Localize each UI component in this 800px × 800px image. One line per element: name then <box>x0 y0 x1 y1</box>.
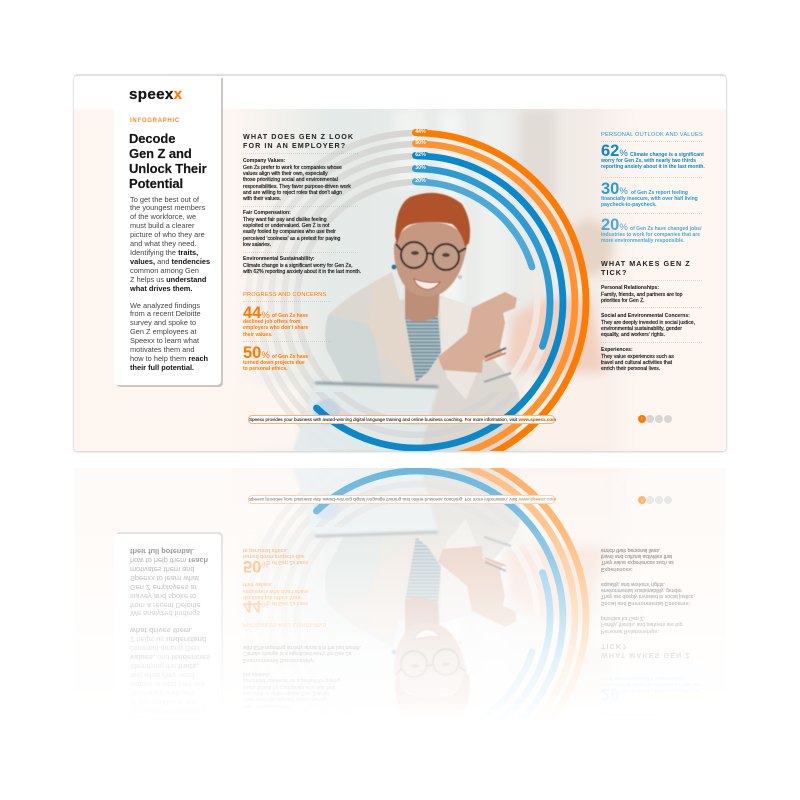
reflection of the card: 62% <box>601 759 628 777</box>
main title: Decode <box>129 130 175 146</box>
reflection of the card: with 62% reporting anxiety about it in the last month. <box>243 644 361 650</box>
ring: 30% <box>417 169 550 346</box>
ring: 44% <box>417 133 586 461</box>
reflection of the card: They want fair pay and dislike feeling <box>243 696 327 702</box>
reflection of the card: low salaries. <box>243 671 271 677</box>
stat text: 30 percent: paycheck-to-paycheck. <box>601 202 657 208</box>
text: company values: values align with their own, especially <box>243 171 328 177</box>
text: fair compensation: low salaries. <box>243 242 271 248</box>
hands and forearm <box>438 292 517 373</box>
left lapel <box>368 272 416 382</box>
stat text: 44 percent: their values. <box>243 332 272 338</box>
reflection of the card: exploited or undervalued. Gen Z is not <box>243 690 329 696</box>
reflection of the card: Personal Relationships: <box>601 628 659 634</box>
dot 3 <box>655 415 663 423</box>
text: social concerns <box>601 320 695 338</box>
earring right <box>458 275 462 279</box>
stat text: 62 percent <box>601 152 705 170</box>
reflection of the card: Gen Z employees at <box>130 583 197 592</box>
reflection of the card: WHAT DOES GEN Z LOOK <box>243 778 354 788</box>
reflection of the card: perceived 'coolness' as a pretext for paying <box>243 677 340 683</box>
hair <box>395 193 470 247</box>
text: social concerns: environmental sustainability, gender <box>601 326 682 332</box>
reflection of the card: Climate change is a significant <box>630 761 704 767</box>
label 20%: 20% <box>415 178 426 184</box>
main title: Unlock Their <box>129 160 207 176</box>
second paragraph: Gen Z employees at <box>130 327 197 336</box>
text: fair compensation: They want fair pay and dislike feeling <box>243 217 327 223</box>
reflection of the card: Environmental Sustainability: <box>243 657 315 663</box>
rings passing over the tablet <box>313 392 564 527</box>
reflection of the card: Climate change is a significant worry for Gen Zs, <box>243 650 353 656</box>
eyebrow: INFOGRAPHIC <box>130 118 180 124</box>
photo with concentric progress rings <box>245 109 618 451</box>
intro paragraph: must build a clearer <box>130 221 194 230</box>
reflection of the card: They are deeply invested in social justice, <box>601 594 695 600</box>
heading: progress and concerns: PROGRESS AND CONCERNS <box>243 292 326 298</box>
stat text: 44 percent: employers who don't share <box>243 325 308 331</box>
ring: 20% <box>417 182 532 267</box>
reflection of the card: worry for Gen Zs, with nearly two thirds <box>601 755 696 761</box>
ring: 62% <box>316 156 563 448</box>
reflection of the card: We analyzed findings <box>130 610 200 618</box>
second paragraph <box>130 300 208 372</box>
ring labels <box>412 129 428 185</box>
reflection of the card: must build a clearer <box>130 689 194 698</box>
reflection of the card: Family, friends, and partners are top <box>601 621 682 627</box>
right lapel <box>440 298 476 399</box>
stat: 20 percent: 20% <box>601 216 628 234</box>
subheading: fair compensation: Fair Compensation: <box>243 210 291 216</box>
stat text: 62 percent: Climate change is a significant <box>630 152 704 158</box>
text: company values: with their values. <box>243 196 281 202</box>
reflection of the card: Experiences: <box>601 566 633 572</box>
reflection of the card <box>116 468 701 704</box>
intro paragraph: Z helps us understand <box>130 275 206 284</box>
text: company values: those prioritizing social and environmental <box>243 177 338 183</box>
intro paragraph: the youngest members <box>130 203 205 212</box>
label 62% <box>412 152 429 159</box>
left white panel <box>114 76 221 385</box>
dot 2 <box>646 415 654 423</box>
text: fair compensation: easily fooled by companies who use their <box>243 229 336 235</box>
eyes <box>411 251 450 257</box>
reflection of the card: environmental sustainability, gender <box>601 587 682 593</box>
text: personal relationships: Family, friends, and partners are top <box>601 292 682 298</box>
stat text: 44 percent <box>243 313 308 338</box>
reflection of the card: and are willing to reject roles that don't align <box>243 723 342 729</box>
stat text: 50 percent <box>243 354 308 372</box>
intro paragraph: values, and tendencies <box>130 257 210 266</box>
main title: Potential <box>129 176 183 190</box>
reflection of the card: values align with their own, especially <box>243 742 328 748</box>
text: environmental sustainability: with 62% reporting anxiety about it in the last month. <box>243 269 361 275</box>
reflection of the card: Gen Zs prefer to work for companies whose <box>243 748 342 754</box>
stat text: 30 percent <box>601 190 698 208</box>
reflection of the card: 20% <box>601 685 628 703</box>
blurred office background <box>232 109 650 451</box>
heading: what makes gen z tick: WHAT MAKES GEN Z <box>601 258 691 268</box>
reflection of the card: reporting anxiety about it in the last month. <box>601 749 705 755</box>
stat text: 20 percent: more environmentally responsible. <box>601 238 685 244</box>
reflection of the card: Company Values: <box>243 755 285 761</box>
label 20% <box>412 178 429 185</box>
reflection of the card: their values. <box>243 581 272 587</box>
text: personal relationships: priorities for Gen Z. <box>601 298 645 304</box>
ring tracks <box>248 133 586 471</box>
stat: 50 percent: 50% <box>243 344 270 362</box>
stat: 62 percent: 62% <box>601 142 628 160</box>
bracelets <box>484 348 511 382</box>
logo: speexx <box>129 86 182 102</box>
text: environmental sustainability <box>242 262 361 275</box>
icon: next arrow: › <box>641 416 643 422</box>
reflection of the card: Z helps us understand <box>130 635 206 644</box>
second paragraph: We analyzed findings <box>130 300 200 310</box>
reflection of the card: of Gen Zs have <box>272 559 308 565</box>
reflection of the card: They value experiences such as <box>601 559 674 565</box>
stat text: 50 percent: to personal ethics. <box>243 366 288 372</box>
reflection of the card: what drives them. <box>130 626 192 635</box>
reflection of the card: PERSONAL OUTLOOK AND VALUES <box>601 782 703 788</box>
reflection of the card: To get the best out of <box>130 716 199 724</box>
intro paragraph: common among Gen <box>130 266 199 275</box>
stat text: 62 percent: reporting anxiety about it in the last month. <box>601 164 705 170</box>
second paragraph: Speexx to learn what <box>130 336 199 345</box>
reflection of the card: Speexx to learn what <box>130 574 199 583</box>
reflection of the card: Social and Environmental Concerns: <box>601 600 690 606</box>
stat text: 50 percent: of Gen Zs have <box>272 354 308 360</box>
text: company values <box>242 164 351 202</box>
label 30% <box>412 165 429 172</box>
heading: personal outlook: PERSONAL OUTLOOK AND VALUES <box>601 132 703 138</box>
stat text: 30 percent: financially insecure, with over half living <box>601 196 698 202</box>
reflection of the card: of Gen Zs have changed jobs/ <box>630 687 702 693</box>
jacket <box>325 283 520 451</box>
label 50%: 50% <box>415 140 426 146</box>
mouth <box>414 279 440 289</box>
text: social concerns: equality, and workers' rights. <box>601 332 665 338</box>
text: experiences: They value experiences such as <box>601 354 674 360</box>
text: experiences: travel and cultural activities that <box>601 360 672 366</box>
text: company values: and are willing to reject roles that don't align <box>243 190 342 196</box>
shirt <box>405 316 441 382</box>
reflection of the card: common among Gen <box>130 644 199 653</box>
reflection of the card: WHAT MAKES GEN Z <box>601 652 691 660</box>
stat text: 20 percent: of Gen Zs have changed jobs/ <box>630 226 702 232</box>
glasses <box>396 242 466 270</box>
reflection of the card: with their values. <box>243 717 281 723</box>
text: environmental sustainability: Climate change is a significant worry for Gen Zs, <box>243 263 353 269</box>
text: social concerns: They are deeply invested in social justice, <box>601 320 695 326</box>
label 50% <box>412 140 429 147</box>
stat text: 44 percent: of Gen Zs have <box>272 313 308 319</box>
reflection of the card: Speexx provides your business with award-winning digital language training and online business coaching. For more information, visit www.speexx.com <box>249 497 556 502</box>
reflection of the card: paycheck-to-paycheck. <box>601 711 657 717</box>
label 44% <box>412 129 429 136</box>
footer callout pill <box>248 415 555 424</box>
stat text: 20 percent <box>601 226 702 244</box>
reflection of the card: 30% <box>601 721 628 739</box>
heading: employer: WHAT DOES GEN Z LOOK <box>243 132 354 140</box>
label 44%: 44% <box>415 129 426 135</box>
label 62%: 62% <box>415 152 426 158</box>
reflection of the card: Identifying the traits, <box>130 662 198 671</box>
text: company values: responsibilities. They favor purpose-driven work <box>243 184 351 190</box>
jacket left shading <box>326 316 382 384</box>
reflection of the card: of Gen Zs report feeling <box>631 723 688 729</box>
reflection of the card: financially insecure, with over half living <box>601 717 698 723</box>
reflection of the card: values, and tendencies <box>130 653 210 662</box>
subheading: company values: Company Values: <box>243 158 285 164</box>
reflection of the card: FOR IN AN EMPLOYER? <box>243 770 346 778</box>
reflection of the card: › <box>641 497 643 503</box>
reflection of the card: and what they need. <box>130 671 197 680</box>
second paragraph: how to help them reach <box>130 354 208 363</box>
intro paragraph: To get the best out of <box>130 194 199 204</box>
footer callout pill: Speexx provides your business with award-winning digital language training and online business coaching. For more information, visit www.speexx.com <box>249 417 556 422</box>
reflection of the card: turned down projects due <box>243 553 305 559</box>
heading: what makes gen z tick: TICK? <box>601 268 627 276</box>
second paragraph: motivates them and <box>130 345 194 354</box>
heading: employer <box>243 132 354 150</box>
reflection of the card: easily fooled by companies who use their <box>243 684 336 690</box>
reflection of the card: of Gen Zs have <box>272 600 308 606</box>
text: fair compensation <box>243 216 340 248</box>
subheading: experiences: Experiences: <box>601 347 633 353</box>
tablet <box>293 383 438 451</box>
intro paragraph: of the workforce, we <box>130 212 196 221</box>
reflection of the card: responsibilities. They favor purpose-driven work <box>243 729 351 735</box>
reflection of the card: Fair Compensation: <box>243 703 291 709</box>
main title <box>129 130 207 190</box>
main title: Gen Z and <box>129 146 192 160</box>
intro paragraph <box>130 194 210 293</box>
reflection of the card: enrich their personal lives. <box>601 547 660 553</box>
stat text: 30 percent: of Gen Zs report feeling <box>631 190 688 196</box>
intro paragraph: and what they need. <box>130 239 197 248</box>
photo background panel <box>74 109 726 451</box>
stat text: 50 percent: turned down projects due <box>243 360 305 366</box>
pagination dots <box>638 415 672 423</box>
reflection of the card: 50% <box>243 557 270 575</box>
stat text: 62 percent: worry for Gen Zs, with nearly two thirds <box>601 158 696 164</box>
icon: next arrow <box>638 415 646 423</box>
neck <box>405 285 440 322</box>
reflection of the card: 44% <box>243 597 270 615</box>
intro paragraph: Identifying the traits, <box>130 248 198 257</box>
reflection of the card: their full potential. <box>130 547 194 556</box>
second paragraph: from a recent Deloitte <box>130 309 201 318</box>
face <box>394 222 467 296</box>
reflection of the card: more environmentally responsible. <box>601 675 685 681</box>
reflection of the card: the youngest members <box>130 707 205 716</box>
label 30%: 30% <box>415 165 426 171</box>
reflection of the card: employers who don't share <box>243 588 308 594</box>
reflection of the card: how to help them reach <box>130 556 208 565</box>
subheading: personal relationships: Personal Relationships: <box>601 285 659 291</box>
stat text: 44 percent: declined job offers from <box>243 319 300 325</box>
reflection of the card: picture of who they are <box>130 680 205 689</box>
reflection of the card: priorities for Gen Z. <box>601 615 645 621</box>
reflection of the card: TICK? <box>601 642 627 652</box>
reflection of the card: declined job offers from <box>243 594 300 600</box>
stat: 30 percent: 30% <box>601 180 628 198</box>
text: company values: Gen Zs prefer to work for companies whose <box>243 165 342 171</box>
reflection of the card: motivates them and <box>130 565 194 574</box>
heading: employer: FOR IN AN EMPLOYER? <box>243 140 346 150</box>
intro paragraph: picture of who they are <box>130 230 205 239</box>
second paragraph: their full potential. <box>130 363 194 372</box>
woman <box>325 193 520 451</box>
stat: 44 percent: 44% <box>243 304 270 322</box>
reflection of the card: industries to work for companies that are <box>601 681 700 687</box>
reflection of the card: from a recent Deloitte <box>130 601 201 610</box>
reflection of the card: of the workforce, we <box>130 698 196 707</box>
intro paragraph: what drives them. <box>130 284 192 293</box>
text: experiences: enrich their personal lives. <box>601 366 660 372</box>
second paragraph: survey and spoke to <box>130 318 196 327</box>
text: personal relationships <box>601 292 682 304</box>
dot 4 <box>664 415 672 423</box>
subheading: social concerns: Social and Environmental Concerns: <box>601 313 690 319</box>
earrings <box>392 265 396 269</box>
card background <box>74 76 726 451</box>
ring: 50% <box>417 144 575 455</box>
text: fair compensation: perceived 'coolness' as a pretext for paying <box>243 236 340 242</box>
reflection of the card: equality, and workers' rights. <box>601 581 665 587</box>
reflection of the card: travel and cultural activities that <box>601 553 672 559</box>
stat text: 20 percent: industries to work for companies that are <box>601 232 700 238</box>
reflection of the card: survey and spoke to <box>130 592 196 601</box>
heading: what makes gen z tick <box>601 258 691 276</box>
subheading: environmental sustainability: Environmental Sustainability: <box>243 256 315 262</box>
text: experiences <box>601 354 674 372</box>
text: fair compensation: exploited or undervalued. Gen Z is not <box>243 223 329 229</box>
reflection of the card: to personal ethics. <box>243 547 288 553</box>
reflection of the card: PROGRESS AND CONCERNS <box>243 622 326 628</box>
reflection of the card: those prioritizing social and environmental <box>243 736 338 742</box>
